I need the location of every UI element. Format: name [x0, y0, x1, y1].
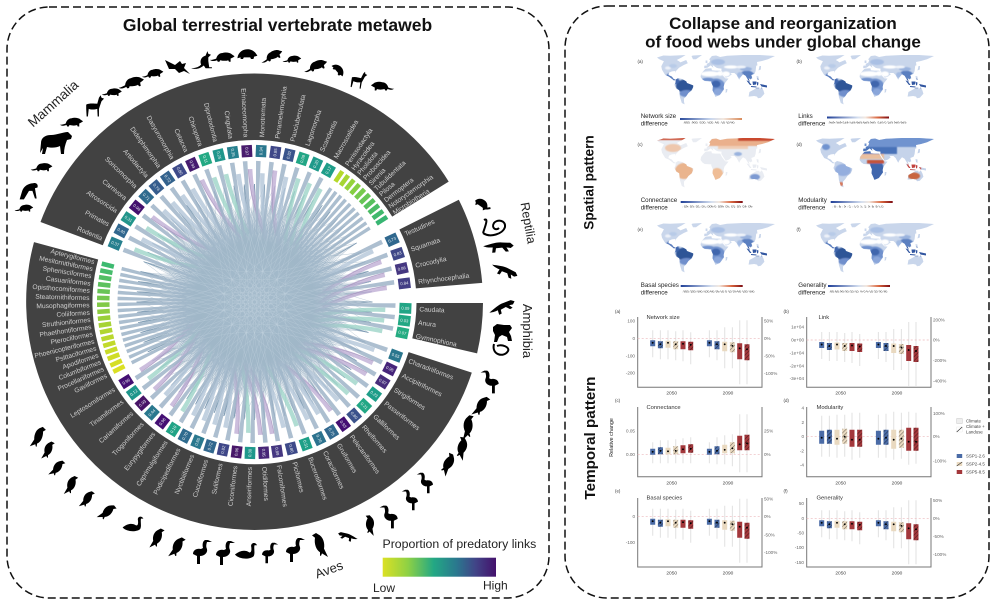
- boxplot panel (e): basal species: [615, 488, 777, 576]
- colour squares: Mammalia: 0.37: [111, 240, 121, 248]
- order labels: Aves: [32, 248, 455, 508]
- colour squares: Reptilia: 0.73: [387, 236, 397, 244]
- boxplot panel (f): generality: (f): [784, 488, 788, 494]
- boxplot panel (c): connectance: 0.05: [626, 428, 635, 434]
- sector: Reptilia band: [399, 200, 482, 288]
- legend: climate and SSP scenarios: SSP5-8.5: [966, 470, 985, 474]
- boxplot panel (b): link: [784, 309, 946, 396]
- order labels: Mammalia: Primates: [84, 210, 111, 228]
- colour squares: Mammalia: 0.74: [152, 182, 161, 192]
- order labels: Mammalia: Afrosoricida: [85, 190, 118, 215]
- legend: climate and SSP scenarios: SSP1-2.6: [966, 454, 985, 458]
- boxplot panel (f): generality: -150: [795, 560, 804, 565]
- colour squares: Aves: 0.30: [247, 448, 253, 457]
- boxplot panel (b): link: 1e+04: [791, 324, 804, 330]
- map panel (a): network size: difference: [641, 120, 668, 128]
- boxplot panel (f): generality: 0%: [933, 516, 940, 521]
- colour squares: Aves: 0.96: [121, 377, 131, 386]
- colour squares: Aves: 0.44: [147, 408, 157, 417]
- map panel (e): basal species: (e): [638, 227, 643, 232]
- boxplot panel (d): modularity: 2: [801, 420, 804, 425]
- order labels: Amphibia: Gymnophiona: [415, 333, 458, 349]
- colour squares: Aves: 0.89: [274, 447, 280, 456]
- icons: bird silhouettes: [30, 371, 499, 565]
- boxplot panel (a): network size: 100: [627, 318, 635, 324]
- panel: global terrestrial vertebrate metaweb: [7, 7, 549, 598]
- order labels: Aves: Falconiformes: [275, 465, 288, 508]
- order labels: Reptilia: Testudines: [404, 218, 436, 238]
- legend: climate and SSP scenarios: Climate +: [966, 424, 985, 429]
- order labels: Mammalia: Didelphimorphia: [128, 126, 162, 170]
- boxplot panel (b): link: -400%: [933, 378, 946, 384]
- order labels: Aves: Procellariiformes: [57, 366, 106, 393]
- order labels: Mammalia: Tubulidentata: [373, 160, 408, 192]
- map panel (c): connectance: difference: [641, 204, 668, 212]
- boxplot panel (b): link: -200%: [933, 358, 946, 363]
- map panel (f): generality: -80-60-40-30-20-10 -5 0 5 10 20 30 40: [828, 289, 888, 294]
- boxplot panel (b): link: Link: [818, 315, 829, 321]
- colour squares: Aves: 0.23: [369, 390, 379, 399]
- map panel (c): connectance: [638, 137, 775, 212]
- map panel (a): network size: -800 -400 -200 -100 -50 -10 10 50: [682, 120, 736, 125]
- colour squares: Mammalia: 0.20: [312, 159, 320, 169]
- order labels: Aves: Mesitornithiformes: [38, 255, 94, 273]
- chord mesh outer swirl: [40, 88, 469, 516]
- boxplot panel (e): basal species: 2050: [666, 570, 677, 576]
- order labels: Aves: Apodiformes: [62, 352, 100, 371]
- boxplot panel (c): connectance: [615, 398, 773, 486]
- boxplot panel (c): connectance: (c): [615, 398, 621, 403]
- map panel (b): links: Links: [798, 113, 813, 120]
- colour squares: Mammalia: 0.17: [324, 165, 333, 175]
- colour squares: Amphibia: [395, 303, 412, 339]
- colour squares: Aves: 0.93: [138, 398, 148, 408]
- boxplot panel (a): network size: 50%: [764, 318, 773, 324]
- map panel (d): modularity: (d): [796, 142, 802, 147]
- order labels: Aves: Coliiformes: [56, 310, 91, 319]
- boxplot panel (f): generality: [784, 488, 946, 576]
- boxplot panel (b): link: -3e+04: [790, 376, 804, 381]
- order labels: Aves: Trogoniformes: [111, 421, 146, 458]
- order labels: Mammalia: Pholidota: [357, 150, 380, 177]
- colour squares: Amphibia: 0.07: [398, 329, 407, 336]
- colour squares: Mammalia: 0.85: [272, 147, 278, 157]
- map panel (e): basal species: difference: [641, 290, 668, 296]
- boxplot panel (a): network size: 2090: [723, 390, 734, 396]
- title: food webs: Collapse and reorganization: [669, 14, 897, 33]
- icons: mammal silhouettes: [15, 48, 394, 212]
- boxplot panel (b): link: -1e+04: [790, 350, 804, 356]
- order labels: Reptilia: Squamata: [410, 237, 441, 254]
- boxplot panel (f): generality: Generality: [816, 496, 843, 502]
- order labels: Amphibia: Caudata: [419, 306, 445, 314]
- boxplot panel (b): link: 0e+00: [791, 338, 804, 342]
- order labels: Reptilia: Crocodylia: [415, 256, 447, 270]
- order labels: Mammalia: Pauciuberculata: [290, 94, 307, 142]
- order labels: Mammalia: Carnivora: [101, 178, 128, 202]
- order labels: Mammalia: Monotremata: [259, 97, 268, 137]
- boxplot panel (d): modularity: 0: [801, 434, 804, 439]
- boxplot panel (a): network size: -100%: [764, 371, 777, 376]
- order labels: Aves: Phoenicopteriformes: [34, 338, 96, 360]
- colour squares: Aves: 0.70: [181, 431, 189, 441]
- order labels: Aves: Pelecaniformes: [348, 434, 381, 476]
- boxplot panel (a): network size: 0%: [764, 336, 771, 341]
- colour squares: Mammalia: 0.82: [286, 150, 292, 160]
- colour squares: Mammalia: 0.31: [124, 214, 134, 223]
- order labels: Aves: Columbiformes: [58, 359, 103, 382]
- boxplot panel (e): basal species: 0%: [764, 514, 771, 519]
- label: Mammalia: Mammalia: [25, 77, 82, 130]
- order labels: Aves: Sphenisciformes: [42, 266, 93, 280]
- boxplot panel (f): generality: 0: [801, 516, 804, 521]
- colour squares: Aves: 0.70: [315, 434, 323, 444]
- boxplot panel (d): modularity: -100%: [933, 458, 946, 464]
- colour squares: Aves: 0.95: [261, 448, 267, 458]
- order labels: Aves: Nyctibiiformes: [174, 453, 196, 495]
- map panel (a): network size: Network size: [641, 113, 677, 120]
- boxplot panel (d): modularity: 0%: [933, 434, 940, 439]
- boxplot panel (b): link: (b): [784, 309, 789, 314]
- boxplot panel (f): generality: 50: [799, 501, 804, 506]
- colour squares: Reptilia: [384, 233, 411, 289]
- boxplot panel (b): link: 2050: [835, 390, 846, 396]
- colour squares: Aves: [97, 261, 403, 459]
- order labels: Aves: Podicipediformes: [153, 447, 183, 496]
- colour squares: Aves: 0.96: [234, 447, 240, 456]
- heading: spatial pattern: Spatial pattern: [582, 135, 597, 230]
- label: Amphibia: Amphibia: [520, 304, 535, 359]
- colour squares: Aves: 0.87: [378, 377, 388, 386]
- order labels: Aves: Tinamiformes: [89, 399, 126, 429]
- order labels: Mammalia: Artiodactyla: [121, 148, 149, 180]
- colour squares: Aves: 0.96: [158, 416, 167, 426]
- order labels: Mammalia: Diprotodontia: [202, 102, 218, 143]
- map panel (f): generality: (f): [796, 227, 801, 232]
- map panel (b): links: difference: [798, 120, 826, 128]
- map panel (c): connectance: -.04-.03-.02-.01-.005 0 .005 .01 .02 .03 .04 .05: [681, 204, 753, 209]
- order labels: Mammalia: Microbiotheria: [392, 188, 431, 217]
- boxplot panel (e): basal species: Basal species: [646, 496, 682, 502]
- legend: proportion of predatory links: High: [483, 578, 508, 592]
- order labels: Mammalia: Sirenia: [368, 167, 388, 187]
- boxplot panel (d): modularity: 2050: [835, 480, 846, 486]
- colour squares: Mammalia: 0.11: [202, 155, 209, 164]
- chord ribbons: [116, 159, 400, 447]
- colour squares: Aves: 0.80: [288, 444, 295, 454]
- map panel (e): basal species: [638, 223, 775, 296]
- sector: Aves band: [26, 242, 472, 530]
- icons: reptile silhouettes: [473, 196, 519, 280]
- colour squares: Aves: 0.31: [302, 439, 310, 449]
- order labels: Mammalia: Notoryctemorphia: [388, 174, 435, 210]
- boxplot panel (a): network size: -100: [626, 354, 635, 358]
- boxplot panel (b): link: 2090: [892, 390, 903, 396]
- order labels: Aves: Cariamiformes: [98, 410, 136, 445]
- boxplot panel (b): link: 0%: [933, 338, 940, 342]
- boxplot panel (b): link: -2e+04: [790, 364, 804, 368]
- order labels: Aves: Casuariiformes: [45, 276, 92, 288]
- panel: collapse and reorganization of food webs: [565, 6, 989, 598]
- order labels: Aves: Musophagiformes: [36, 302, 90, 310]
- boxplot panel (a): network size: -50%: [764, 354, 775, 358]
- boxplot panel (d): modularity: 100%: [933, 411, 945, 416]
- colour squares: Reptilia: 0.83: [393, 250, 403, 257]
- order labels: Reptilia: [404, 218, 470, 286]
- boxplot panel (e): basal species: 50%: [764, 496, 773, 502]
- sector: Amphibia band: [412, 303, 483, 353]
- order labels: Aves: Gruiformes: [335, 443, 358, 475]
- boxplot panel (d): modularity: Modularity: [816, 405, 843, 411]
- heading: temporal pattern: Temporal pattern: [582, 377, 599, 499]
- boxplot panel (a): network size: [615, 309, 777, 396]
- boxplot panel (f): generality: -50: [797, 531, 804, 536]
- chord mesh dense core: [158, 206, 350, 398]
- legend: proportion of predatory links: Low: [373, 581, 395, 595]
- legend: climate and SSP scenarios: SSP2-4.5: [966, 462, 985, 466]
- order labels: Mammalia: Chiroptera: [186, 116, 203, 148]
- boxplot panel (a): network size: (a): [615, 309, 621, 314]
- order labels: Mammalia: Hyracoidea: [351, 140, 376, 172]
- order labels: Aves: Apterygiformes: [50, 248, 96, 266]
- legend: proportion of predatory links: Proportion of predatory links: [382, 537, 536, 551]
- boxplot panel (e): basal species: -100%: [764, 550, 777, 555]
- boxplot panel (f): generality: -50%: [933, 534, 944, 539]
- boxplot panel (d): modularity: 4: [801, 406, 804, 410]
- order labels: Aves: Strigiformes: [392, 387, 427, 412]
- map panel (e): basal species: Basal species: [641, 282, 679, 289]
- order labels: Aves: Opisthocomiformes: [32, 284, 91, 295]
- colour squares: Mammalia: 0.98: [132, 203, 142, 212]
- colour squares: Aves: 0.75: [327, 427, 336, 437]
- colour squares: Mammalia: 0.80: [176, 166, 184, 176]
- boxplot panel (b): link: 200%: [933, 318, 945, 322]
- label: Reptilia: Reptilia: [517, 201, 539, 245]
- chart: circular chord diagram: [26, 74, 483, 530]
- order labels: Mammalia: Lagomorpha: [305, 109, 323, 147]
- map panel (d): modularity: Modularity: [798, 197, 828, 204]
- boxplot panel (d): modularity: 2090: [892, 480, 903, 486]
- legend: climate and SSP scenarios: [957, 418, 985, 474]
- boxplot panel (d): modularity: -4: [800, 462, 804, 468]
- colour squares: Aves: 0.82: [220, 445, 226, 454]
- boxplot panel (e): basal species: (e): [615, 488, 621, 494]
- map panel (d): modularity: difference: [798, 204, 826, 212]
- map panel (b): links: -4e4-3e4-2e4-1e4-8e3-6e3-4e3 -2e3 0 2e3 4e3 8e3: [827, 120, 907, 125]
- boxplot panel (e): basal species: 2090: [723, 570, 734, 576]
- order labels: Aves: Struthioniformes: [42, 317, 92, 329]
- order labels: Mammalia: Pilosa: [378, 181, 397, 198]
- boxplot panel (d): modularity: -2: [800, 448, 804, 454]
- colour squares: Aves: 0.65: [193, 436, 201, 446]
- order labels: Mammalia: Dasyuromorphia: [145, 115, 175, 161]
- map panel (c): connectance: Connectance: [641, 197, 678, 204]
- map panel (b): links: (b): [796, 59, 802, 64]
- map panel (f): generality: [796, 223, 934, 296]
- legend: climate and SSP scenarios: Landuse: [966, 430, 983, 434]
- order labels: Aves: Rheiformes: [360, 424, 388, 455]
- colour squares: Aves: 0.12: [129, 388, 139, 397]
- order labels: Aves: Passeriformes: [383, 401, 421, 433]
- colour squares: Reptilia: 0.84: [400, 280, 409, 286]
- colour squares: Mammalia: 0.72: [163, 174, 173, 184]
- legend: proportion of predatory links: [373, 537, 536, 595]
- colour squares: Mammalia: 0.34: [258, 146, 264, 155]
- colour squares: Aves: 0.10: [169, 424, 178, 434]
- order labels: Aves: Ciconiiformes: [228, 465, 239, 507]
- boxplot panel (a): network size: 2050: [666, 390, 677, 396]
- boxplot panel (a): network size: Network size: [646, 315, 680, 321]
- boxplot panel (d): modularity: (d): [784, 398, 789, 403]
- map panel (f): generality: difference: [798, 290, 826, 296]
- title: metaweb: Global terrestrial vertebrate metaweb: [123, 15, 432, 35]
- colour squares: Amphibia: 0.03: [400, 318, 409, 324]
- order labels: Aves: Suliformes: [211, 462, 225, 495]
- boxplot panel (f): generality: 2090: [892, 570, 903, 576]
- order labels: Mammalia: Rodentia: [76, 226, 104, 242]
- boxplot panel (c): connectance: 0.00: [626, 452, 635, 457]
- map panel (d): modularity: [796, 137, 934, 212]
- colour squares: Mammalia: 0.35: [230, 148, 236, 158]
- boxplot panel (c): connectance: 2050: [666, 480, 677, 486]
- colour squares: Aves: 0.93: [339, 419, 348, 429]
- colour squares: Mammalia: 0.97: [244, 147, 250, 156]
- boxplot panel (a): network size: -200: [626, 370, 635, 376]
- order labels: Mammalia: Perissodactyla: [344, 127, 375, 168]
- colour squares: Mammalia: 0.40: [117, 227, 127, 235]
- colour squares: Reptilia: 0.86: [397, 265, 407, 272]
- boxplot panel (c): connectance: 2090: [723, 480, 734, 486]
- order labels: Aves: Steatornithiformes: [35, 294, 90, 302]
- map panel (f): generality: Generality: [798, 282, 827, 289]
- boxplot panel (a): network size: 0: [632, 336, 635, 341]
- order labels: Mammalia: Peramelemorphia: [275, 86, 289, 139]
- order labels: Mammalia: [76, 86, 435, 242]
- title: food webs: of food webs under global change: [645, 32, 921, 52]
- axis title: relative change: Relative change: [609, 418, 615, 457]
- colour squares: Mammalia: [108, 145, 388, 251]
- boxplot panel (f): generality: -100%: [933, 552, 946, 557]
- boxplot panel (f): generality: -100: [795, 545, 804, 550]
- colour squares: Mammalia: 0.94: [188, 160, 197, 170]
- colour squares: Mammalia: 0.71: [142, 192, 151, 202]
- boxplot panel (c): connectance: 0%: [764, 452, 771, 457]
- boxplot panel (f): generality: 50%: [933, 498, 942, 503]
- map panel (a): network size: (a): [638, 59, 643, 64]
- boxplot panel (f): generality: 2050: [835, 570, 846, 576]
- legend: climate and SSP scenarios: Climate: [966, 418, 981, 424]
- order labels: Mammalia: Macroscelidea: [333, 119, 360, 160]
- order labels: Aves: Eurypygiformes: [123, 431, 158, 472]
- boxplot panel (e): basal species: 0: [632, 514, 635, 519]
- boxplot panel (e): basal species: -100: [626, 540, 635, 545]
- boxplot panel (c): connectance: 25%: [764, 428, 773, 434]
- order labels: Amphibia: Anura: [418, 320, 437, 329]
- order labels: Aves: Coraciiformes: [321, 450, 345, 491]
- order labels: Aves: Anseriformes: [246, 466, 254, 506]
- boxplot panel (e): basal species: -50%: [764, 532, 775, 538]
- order labels: Aves: Otidiformes: [260, 467, 269, 502]
- map panel (d): modularity: -.8 -.6 -.4 -.2 -.1 0 .1 .2 .4 .6 .8 1.0: [831, 204, 885, 209]
- order labels: Mammalia: Cingulata: [223, 110, 234, 140]
- map panel (e): basal species: -300-200-150-100-50-25-10 0 10 25 50 100 150: [681, 289, 756, 294]
- colour squares: Amphibia: 0.09: [401, 306, 410, 311]
- icons: amphibian silhouettes: [488, 298, 517, 355]
- colour squares: Mammalia: 0.25: [216, 151, 223, 160]
- boxplot panel (d): modularity: [784, 398, 946, 486]
- colour squares: Aves: 0.80: [350, 411, 359, 421]
- order labels: Aves: Bucerotiformes: [306, 456, 328, 502]
- order labels: Aves: Pterocliformes: [50, 331, 94, 346]
- boxplot panel (c): connectance: Connectance: [646, 405, 681, 411]
- order labels: Mammalia: Scandentia: [319, 119, 339, 153]
- colour squares: Aves: 0.95: [385, 365, 395, 373]
- order labels: Aves: Cuculiformes: [192, 458, 210, 498]
- order labels: Amphibia: [415, 306, 458, 349]
- order labels: Mammalia: Soricomorpha: [103, 156, 138, 190]
- order labels: Aves: Leptosomiformes: [69, 386, 117, 420]
- colour squares: Aves: 0.21: [360, 401, 369, 411]
- label: Aves: Aves: [313, 557, 346, 581]
- order labels: Aves: Galliformes: [371, 413, 401, 442]
- order labels: Mammalia: Proboscidea: [362, 149, 392, 182]
- order labels: Aves: Phaethontiformes: [39, 324, 93, 339]
- map panel (a): network size: [638, 55, 775, 128]
- sector: Mammalia band: [40, 74, 449, 245]
- order labels: Reptilia: Rhynchocephalia: [418, 273, 470, 286]
- colour squares: Mammalia: 0.09: [299, 154, 306, 164]
- order labels: Aves: Caprimulgiformes: [135, 439, 170, 488]
- order labels: Aves: Piciformes: [290, 461, 305, 494]
- map panel (c): connectance: (c): [638, 142, 643, 147]
- map panel (b): links: [796, 55, 934, 128]
- order labels: Mammalia: Dermoptera: [383, 177, 415, 204]
- order labels: Aves: Accipitriformes: [400, 373, 443, 399]
- order labels: Mammalia: Cetacea: [172, 128, 189, 154]
- order labels: Aves: Gaviiformes: [73, 372, 109, 395]
- order labels: Mammalia: Erinaceomorpha: [239, 88, 249, 138]
- colour squares: Aves: 0.72: [206, 441, 214, 451]
- order labels: Aves: Charadriiformes: [407, 358, 455, 382]
- order labels: Aves: Psittaciformes: [55, 345, 98, 364]
- colour squares: Aves: 0.55: [391, 352, 401, 360]
